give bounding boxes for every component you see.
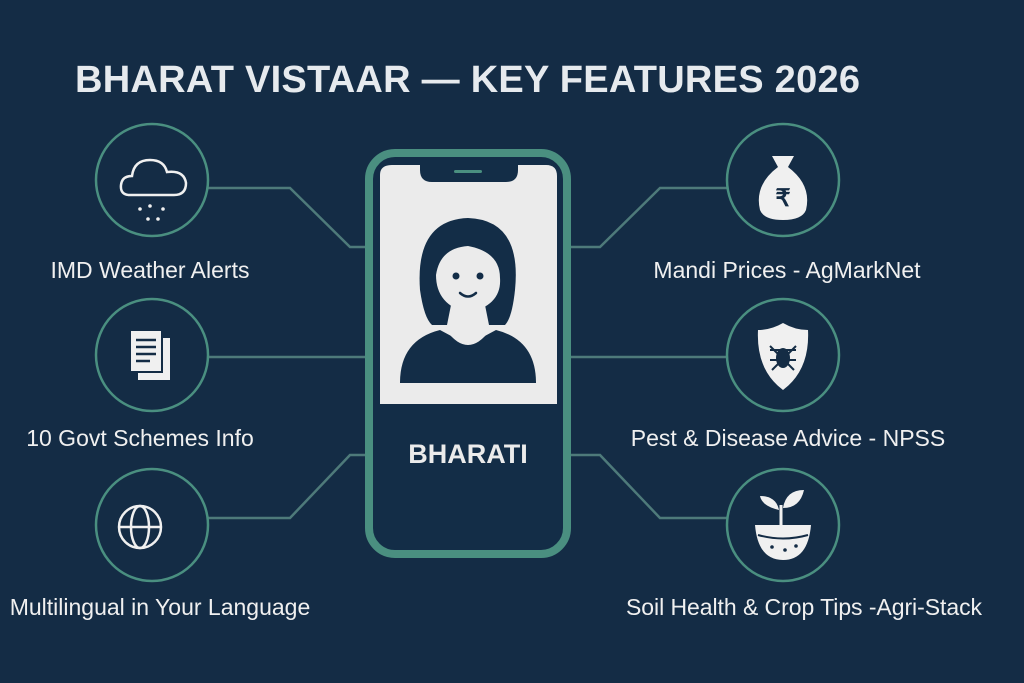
feature: soil bbox=[626, 469, 982, 620]
feature: mandi prices bbox=[653, 124, 921, 283]
feature: weather bbox=[51, 124, 249, 283]
feature: schemes: 10 Govt Schemes Info bbox=[26, 425, 254, 451]
feature: multilingual: Multilingual in Your Language bbox=[10, 594, 310, 620]
title: BHARAT VISTAAR — KEY FEATURES 2026 bbox=[75, 59, 860, 101]
feature: weather: IMD Weather Alerts bbox=[51, 257, 249, 283]
feature: pest bbox=[631, 299, 945, 451]
feature: soil: Soil Health & Crop Tips -Agri-Stack bbox=[626, 594, 982, 620]
feature: mandi prices: Mandi Prices - AgMarkNet bbox=[653, 257, 921, 283]
phone label: BHARATI bbox=[408, 439, 528, 469]
feature: multilingual bbox=[10, 469, 310, 620]
phone screen bbox=[380, 165, 557, 404]
feature: schemes bbox=[26, 299, 254, 451]
feature: pest: Pest & Disease Advice - NPSS bbox=[631, 425, 945, 451]
phone bbox=[369, 153, 567, 554]
feature: mandi prices: ₹ bbox=[775, 185, 791, 212]
avatar bbox=[400, 218, 536, 383]
connector lines bbox=[208, 188, 727, 518]
